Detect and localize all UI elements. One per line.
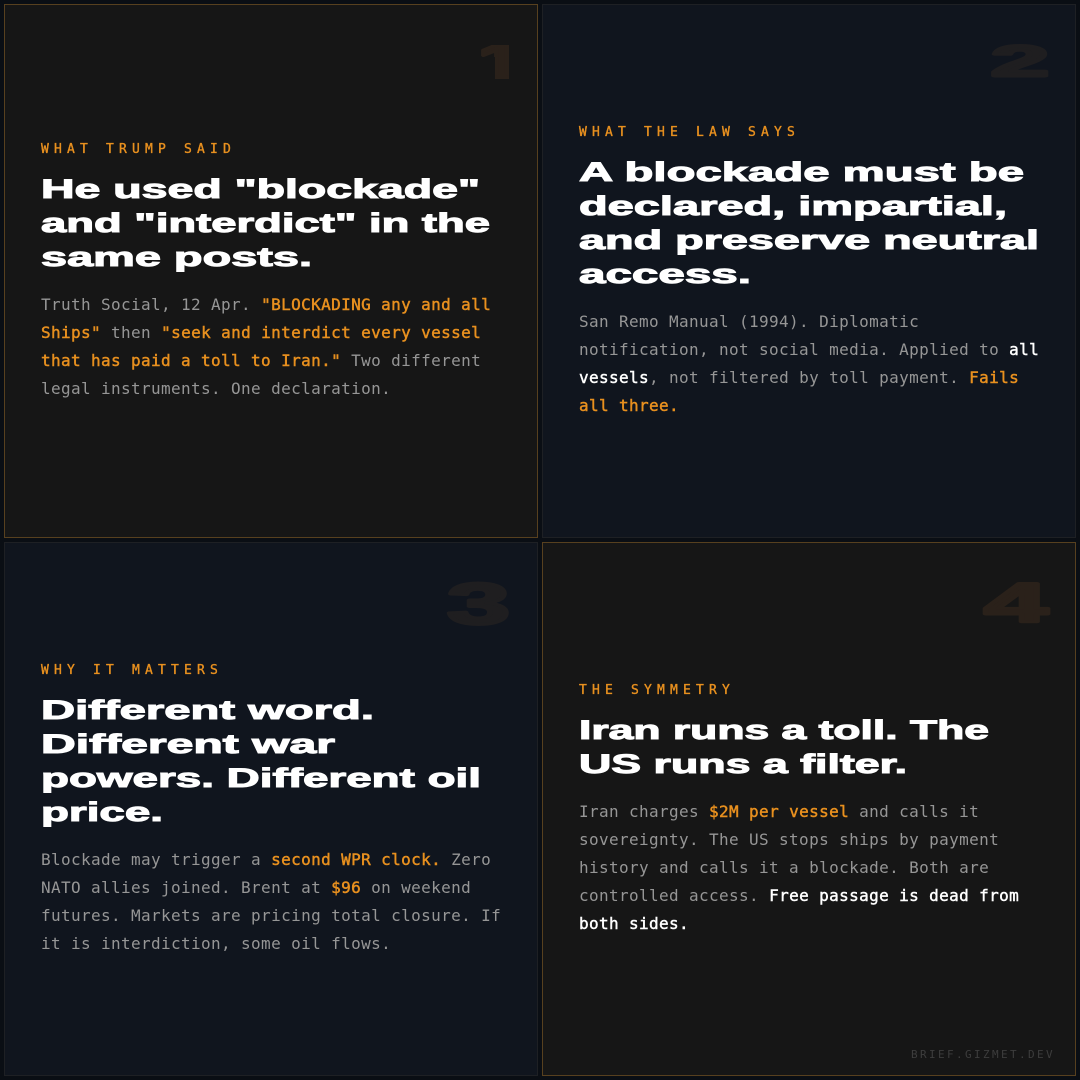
panel: what Trump said (4, 4, 538, 538)
heading: access. (579, 259, 751, 289)
body text: Truth Social, 12 Apr. "BLOCKADING any and all Ships" then "seek and interdict every vessel that has paid a toll to Iran." Two different legal instruments. One declaration. (41, 295, 491, 398)
eyebrow: THE SYMMETRY (579, 683, 735, 698)
heading: He used "blockade" (41, 174, 480, 204)
heading (41, 695, 481, 827)
heading: US runs a filter. (579, 749, 907, 779)
heading (579, 715, 989, 779)
body text: Iran charges $2M per vessel and calls it sovereignty. The US stops ships by payment history and calls it a blockade. Both are controlled access. Free passage is dead from both sides. (579, 802, 1019, 933)
panel: why it matters (4, 542, 538, 1076)
heading (41, 174, 490, 272)
heading: and preserve neutral (579, 225, 1039, 255)
watermark: BRIEF.GIZMET.DEV (911, 1048, 1055, 1061)
heading: powers. Different oil (41, 763, 481, 793)
heading (579, 157, 1039, 289)
panel number 1: 1 (478, 34, 522, 90)
body text: San Remo Manual (1994). Diplomatic notification, not social media. Applied to all vessels, not filtered by toll payment. Fails all three. (579, 312, 1039, 415)
panel number 2: 2 (991, 37, 1049, 86)
heading: and "interdict" in the (41, 208, 490, 238)
eyebrow: WHAT THE LAW SAYS (579, 125, 800, 140)
panel number 3: 3 (447, 572, 510, 637)
heading: Iran runs a toll. The (579, 715, 989, 745)
body text: Blockade may trigger a second WPR clock. Zero NATO allies joined. Brent at $96 on weekend futures. Markets are pricing total closure. If it is interdiction, some oil flows. (41, 850, 501, 953)
heading: A blockade must be (579, 157, 1024, 187)
eyebrow: WHAT TRUMP SAID (41, 142, 236, 157)
heading: same posts. (41, 242, 312, 272)
heading: Different war (41, 729, 335, 759)
panel number 4: 4 (984, 571, 1048, 634)
panel: what the law says (542, 4, 1076, 538)
panel: the symmetry (542, 542, 1076, 1076)
eyebrow: WHY IT MATTERS (41, 663, 223, 678)
heading: declared, impartial, (579, 191, 1007, 221)
heading: Different word. (41, 695, 374, 725)
heading: price. (41, 797, 163, 827)
